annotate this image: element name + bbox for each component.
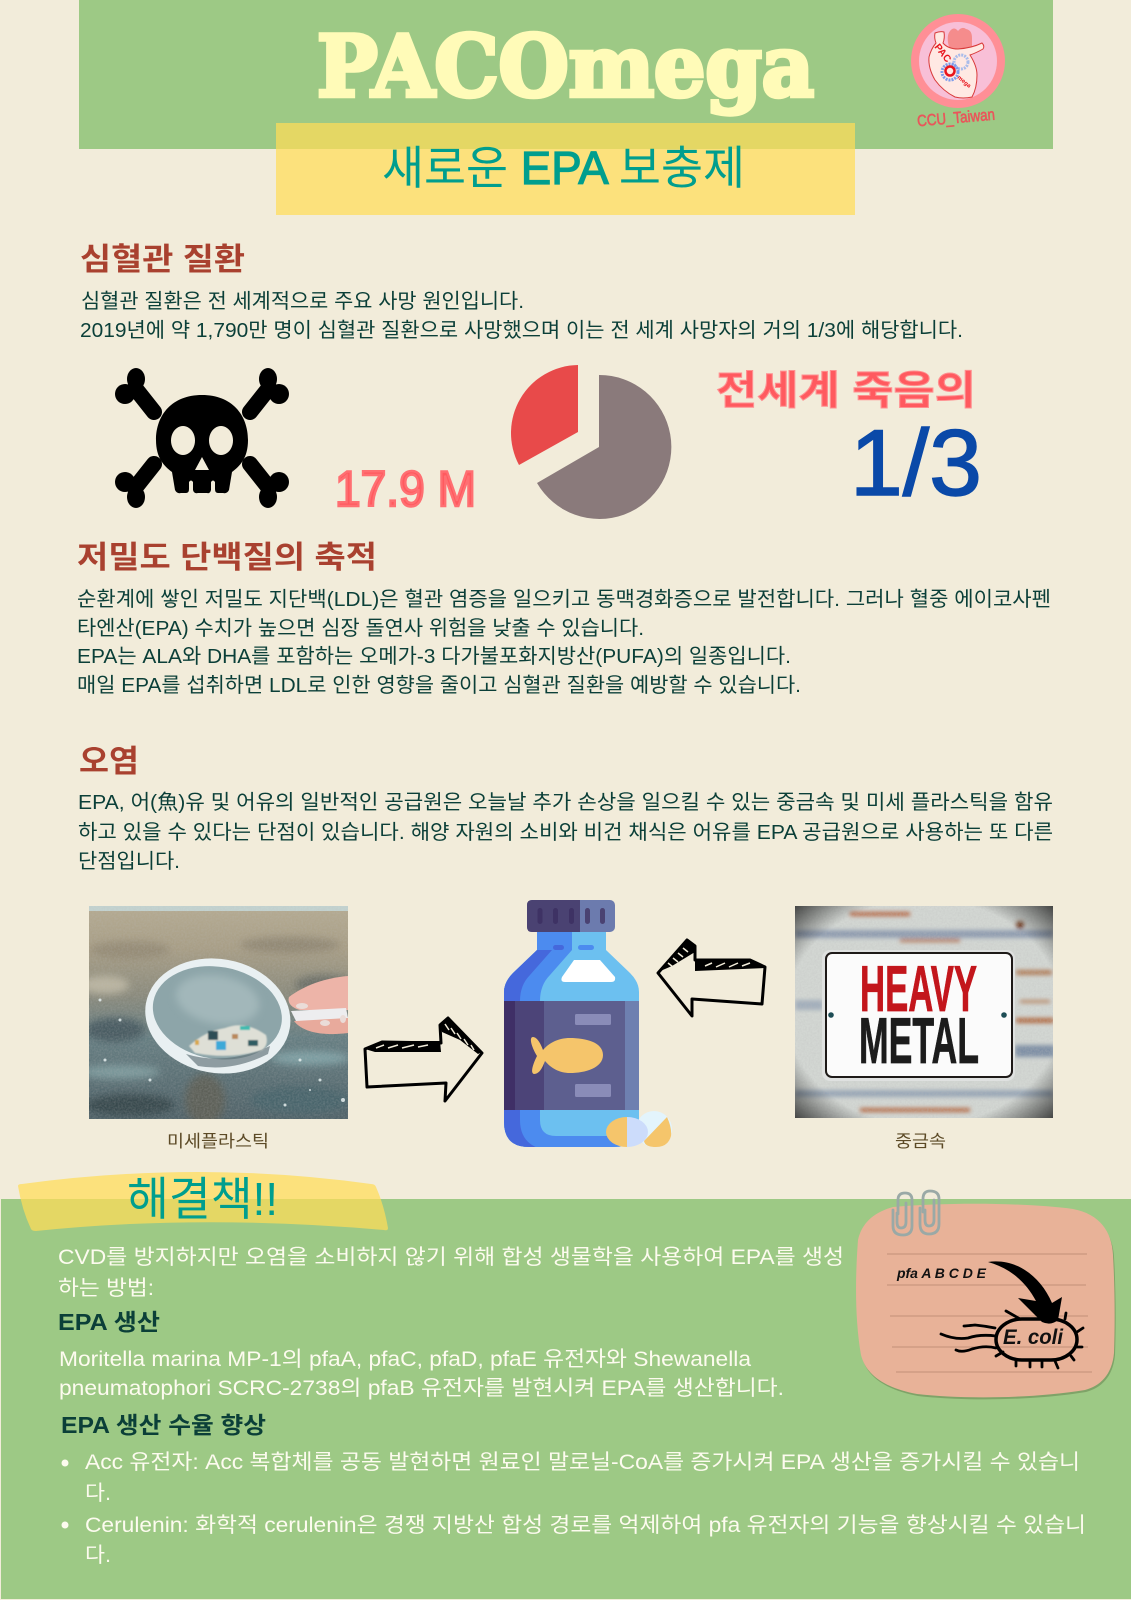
caption: microplastics: 미세플라스틱 <box>167 1132 269 1151</box>
gene label: pfa A B C D E <box>896 1266 987 1281</box>
bacterium <box>941 1309 1083 1368</box>
stat: 1/3: 1/3 <box>850 410 982 515</box>
text block: LDL accumulation: 매일 EPA를 섭취하면 LDL로 인한 영향을 줄이고 심혈관 질환을 예방할 수 있습니다. <box>77 674 801 697</box>
pie slice: cardiovascular deaths <box>511 365 578 465</box>
pie chart: one third of deaths <box>511 365 671 519</box>
arrow: microplastics into bottle <box>365 1018 482 1101</box>
text block: EPA production: pneumatophori SCRC-2738의 pfaB 유전자를 발현시켜 EPA를 생산합니다. <box>59 1377 784 1400</box>
photo: heavy metal sign: HEAVY <box>860 952 977 1025</box>
subtitle band <box>276 123 855 215</box>
text block: pollution <box>78 791 1053 873</box>
fish <box>531 1037 603 1074</box>
heading: EPA production: EPA 생산 <box>58 1309 160 1335</box>
list: yield improvements: 다. <box>85 1544 111 1567</box>
label rects <box>575 1014 611 1025</box>
caption: heavy metal: 중금속 <box>895 1132 946 1151</box>
text block: EPA production <box>59 1348 784 1400</box>
stat: 17.9 M: 17.9 M <box>335 461 476 517</box>
heading: solutions: 해결책!! <box>127 1173 278 1225</box>
strainer <box>145 958 290 1074</box>
text block: pollution: EPA, 어(魚)유 및 어유의 일반적인 공급원은 오늘날 추가 손상을 일으킬 수 있는 중금속 및 미세 플라스틱을 함유 <box>78 791 1053 814</box>
text block: cardiovascular disease: 2019년에 약 1,790만 명이 심혈관 질환으로 사망했으며 이는 전 세계 사망자의 거의 1/3에 해당합니다. <box>80 319 963 342</box>
text block: LDL accumulation <box>77 588 1051 697</box>
note card: E. coli diagram <box>856 1191 1116 1399</box>
sparkle <box>98 998 345 1106</box>
plastic pile <box>189 1025 267 1056</box>
heading: low-density protein accumulation: 저밀도 단백질의 축적 <box>77 540 377 575</box>
text block: solution intro: CVD를 방지하지만 오염을 소비하지 않기 위해 합성 생물학을 사용하여 EPA를 생성 <box>58 1246 844 1269</box>
text block: solution intro: 하는 방법: <box>58 1277 154 1300</box>
icon: fish oil bottle <box>504 900 672 1150</box>
header banner <box>79 0 1053 149</box>
list: yield improvements <box>62 1451 1086 1567</box>
logo: CCU Taiwan heart <box>911 14 1005 108</box>
logo caption: CCU_Taiwan <box>916 107 996 130</box>
list: yield improvements: Cerulenin: 화학적 cerulenin은 경쟁 지방산 합성 경로를 억제하여 pfa 유전자의 기능을 향상시킬 수 있습니 <box>85 1514 1086 1537</box>
pills <box>636 1111 672 1147</box>
heading banner: solutions <box>18 1172 388 1231</box>
text block: pollution: 단점입니다. <box>78 850 180 873</box>
heading: cardiovascular disease: 심혈관 질환 <box>80 242 245 277</box>
bottle cap <box>527 900 615 932</box>
logo: CCU Taiwan heart: mega <box>956 75 972 90</box>
heading: pollution: 오염 <box>79 744 139 779</box>
panel: solution <box>1 1199 1131 1599</box>
text block: EPA production: Moritella marina MP-1의 pfaA, pfaC, pfaD, pfaE 유전자와 Shewanella <box>59 1348 751 1371</box>
photo: heavy metal sign <box>795 906 1055 1118</box>
logo: CCU Taiwan heart: PAC <box>932 42 953 65</box>
list: yield improvements: Acc 유전자: Acc 복합체를 공동 발현하면 원료인 말로닐-CoA를 증가시켜 EPA 생산을 증가시킬 수 있습니 <box>85 1451 1080 1474</box>
title: PACOmega <box>317 17 814 116</box>
text block: LDL accumulation: EPA는 ALA와 DHA를 포함하는 오메가-3 다가불포화지방산(PUFA)의 일종입니다. <box>77 645 791 668</box>
photo: microplastics in strainer <box>80 906 355 1126</box>
text block: cardiovascular disease <box>80 290 963 342</box>
text block: cardiovascular disease: 심혈관 질환은 전 세계적으로 주요 사망 원인입니다. <box>81 290 524 313</box>
sign <box>822 950 1015 1081</box>
list: yield improvements: 다. <box>85 1482 111 1505</box>
text block: LDL accumulation: 타엔산(EPA) 수치가 높으면 심장 돌연사 위험을 낮출 수 있습니다. <box>77 617 644 640</box>
heading: improving EPA yield: EPA 생산 수율 향상 <box>61 1412 266 1438</box>
arrow: heavy metal into bottle <box>658 940 765 1016</box>
paperclips <box>893 1191 939 1235</box>
arrow: genes into E. coli <box>988 1261 1062 1324</box>
stat label: of worldwide deaths: 전세계 죽음의 <box>716 369 976 413</box>
text block: pollution: 하고 있을 수 있다는 단점이 있습니다. 해양 자원의 소비와 비건 채식은 어유를 EPA 공급원으로 사용하는 또 다른 <box>78 821 1053 844</box>
icon: skull and crossbones <box>115 368 289 508</box>
subtitle: 새로운 EPA 보충제 <box>382 142 745 194</box>
text block: solution intro <box>58 1246 844 1300</box>
hand <box>289 976 348 1010</box>
photo: heavy metal sign: METAL <box>859 1004 979 1077</box>
text block: LDL accumulation: 순환계에 쌓인 저밀도 지단백(LDL)은 혈관 염증을 일으키고 동맥경화증으로 발전합니다. 그러나 혈중 에이코사펜 <box>77 588 1051 611</box>
bottle body <box>504 932 639 1147</box>
pie slice: remaining deaths <box>537 375 671 519</box>
E. coli label: E. coli <box>1003 1326 1064 1349</box>
